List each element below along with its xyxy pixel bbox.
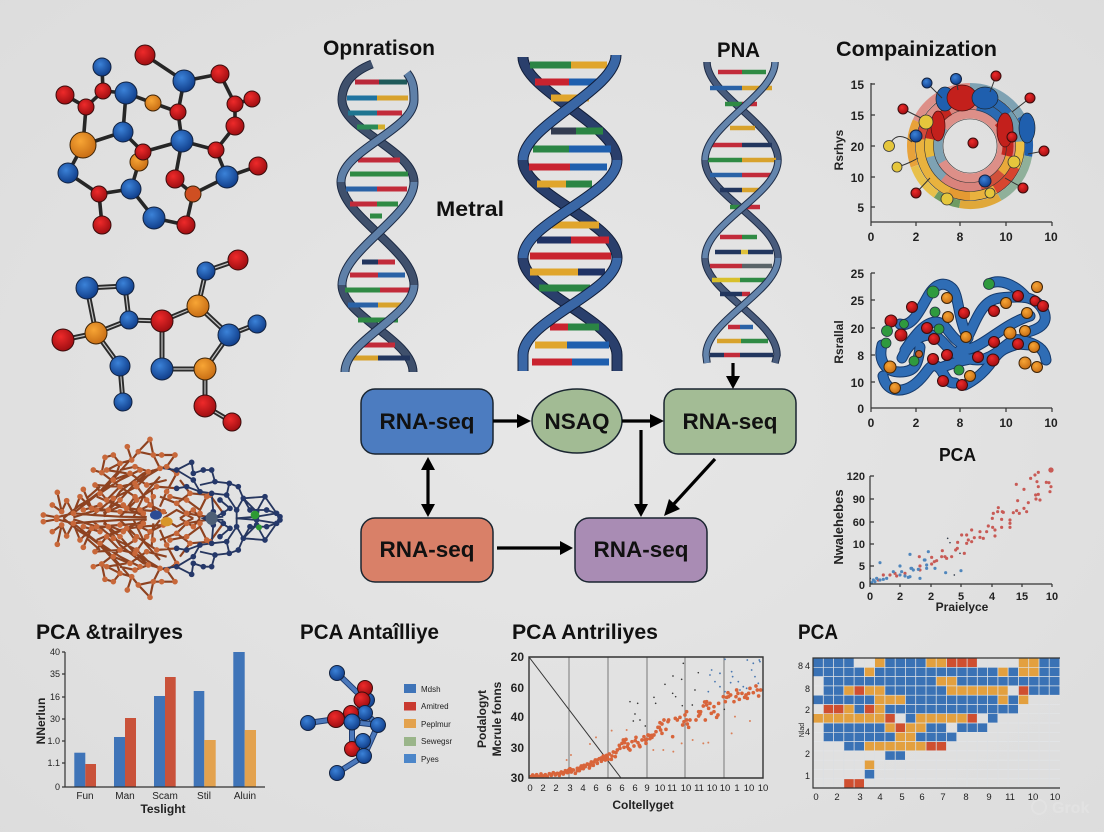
chart: heatmap: 8 [798,661,803,671]
flow box: purple RNA-seq: RNA-seq [594,537,688,562]
arrow: green box diagonal to purple box [664,459,715,516]
chart: dense scatter with gridlines: 10 [758,783,768,794]
chart: dense scatter with gridlines: 2 [540,783,546,794]
flowchart [361,363,796,582]
legend: Pyes [421,755,439,764]
chart: circular ring diagram: Rsrhys [832,129,846,170]
chart: heatmap: 4 [805,727,810,737]
chart: circular ring diagram: 15 [851,78,864,92]
heading: PCA heatmap: PCA [798,621,838,644]
chart: circular ring diagram: 2 [913,230,920,244]
chart: dense scatter with gridlines: 6 [619,783,625,794]
chart: heatmap: 11 [1005,792,1015,803]
chart: dense scatter with gridlines: 40 [511,710,524,724]
chart: dense scatter with gridlines [475,650,768,812]
flow node: NSAQ [532,389,622,453]
heading: PCA &trailryes: PCA &trailryes [36,621,183,644]
chart: grouped bars: NNerlun [34,698,48,744]
chart: dense scatter with gridlines: Podalogyt [475,690,489,748]
chart: heatmap: 7 [940,792,946,803]
chart: PCA scatter: 10 [853,539,865,551]
flow box: blue RNA-seq: RNA-seq [380,409,474,434]
chart: tangled tube diagram: 8 [857,349,864,363]
chart: circular ring diagram: 5 [857,201,864,215]
chart: dense scatter with gridlines: 11 [694,783,704,794]
chart: grouped bars: Stil [197,791,211,802]
chart: grouped bars: 1.0 [47,736,60,746]
chart: tangled tube diagram: Rsrallal [832,320,846,364]
chart: PCA scatter: 5 [859,561,865,573]
chart: heatmap: 3 [857,792,863,803]
chart: dense scatter with gridlines: Coltellyget [612,798,674,812]
heading: PCA Antaillye: PCA Antaîlliye [300,621,439,644]
chart: dense scatter with gridlines: 1 [734,783,740,794]
chart: heatmap: 2 [805,749,810,759]
chart: tangled tube diagram [832,267,1058,430]
chart: dense scatter with gridlines: 30 [511,741,524,755]
heading: PNA: PNA [717,39,760,62]
chart: heatmap: 8 [963,792,969,803]
chart: dense scatter with gridlines: 6 [632,783,638,794]
legend: Sewegsr [421,737,452,746]
chart: dense scatter with gridlines: 10 [681,783,691,794]
chart: circular ring diagram [832,64,1058,244]
chart: grouped bars: 1.1 [47,758,60,768]
chart: tangled tube diagram: 25 [851,294,864,308]
arrow: helix down to green box [726,363,740,389]
molecule: protein network [43,439,280,597]
chart: tangled tube diagram: 10 [851,376,864,390]
chart: dense scatter with gridlines: 10 [707,783,717,794]
chart: tangled tube diagram: 20 [851,322,864,336]
chart: heatmap: 10 [1050,792,1060,803]
chart: heatmap: 9 [986,792,992,803]
chart: PCA scatter: 5 [958,591,964,603]
chart: PCA scatter: Nwalehebes [831,489,846,565]
chart: heatmap: 10 [1028,792,1038,803]
flow box: green RNA-seq: RNA-seq [682,409,778,434]
watermark: Grok [1032,800,1089,817]
chart: PCA scatter: 15 [1016,591,1028,603]
chart: PCA scatter: 10 [1046,591,1058,603]
flow box: purple RNA-seq [575,518,707,582]
chart: heatmap: 1 [805,771,810,781]
chart: heatmap: 0 [813,792,819,803]
legend: Peplmur [421,720,451,729]
chart: heatmap: 5 [899,792,905,803]
chart: grouped bars: 40 [50,647,60,657]
chart: dense scatter with gridlines: 3 [567,783,573,794]
arrow: blue and red boxes double headed [421,457,435,517]
heading: Compainization: Compainization [836,38,997,61]
chart: heatmap: Nlad [799,723,806,737]
heading: PCA Antriliyes: PCA Antriliyes [512,621,658,644]
legend [404,684,452,764]
chart: grouped bars: 35 [50,669,60,679]
chart: circular ring diagram: 15 [851,109,864,123]
flow box: blue RNA-seq [361,389,493,454]
arrow: red box to purple box [497,541,573,555]
chart: grouped bars: Teslight [140,802,186,816]
chart: PCA scatter: 60 [853,517,865,529]
chart: PCA scatter: 2 [928,591,934,603]
chart: grouped bars: 16 [50,692,60,702]
chart: tangled tube diagram: 0 [868,416,875,430]
legend: Mdsh [421,685,441,694]
chart: heatmap [798,658,1060,803]
chart: dense scatter with gridlines: 20 [511,650,524,664]
chart: PCA scatter: 0 [859,580,865,592]
chart: dense scatter with gridlines: 10 [720,783,730,794]
chart: circular ring diagram: 8 [957,230,964,244]
chart: heatmap: 4 [805,661,810,671]
chart: dense scatter with gridlines: 60 [511,681,524,695]
flow box: red RNA-seq: RNA-seq [380,537,474,562]
chart: PCA scatter: 90 [853,494,865,506]
chart: dense scatter with gridlines: 11 [667,783,677,794]
chart: circular ring diagram: 20 [851,140,864,154]
arrow: blue box to NSAQ [493,414,531,428]
chart: grouped bars: Scam [152,791,178,802]
chart: PCA scatter [831,470,1058,614]
helix: centre DNA [523,55,617,371]
chart: dense scatter with gridlines: 6 [593,783,599,794]
chart: tangled tube diagram: 25 [851,267,864,281]
molecule: medium two ring [52,250,266,431]
chart: dense scatter with gridlines: 10 [744,783,754,794]
chart: heatmap: 2 [805,705,810,715]
chart: grouped bars: 0 [55,782,60,792]
chart: PCA scatter: 2 [897,591,903,603]
legend: Amitred [421,702,449,711]
heading: Opnratison: Opnratison [323,37,435,60]
chart: grouped bars: 30 [50,714,60,724]
chart: tangled tube diagram: 8 [957,416,964,430]
chart: tangled tube diagram: 2 [913,416,920,430]
chart: dense scatter with gridlines: 30 [511,771,524,785]
molecule: large ball and stick [56,45,267,234]
helix: right DNA [705,62,778,363]
chart: circular ring diagram: 10 [999,230,1013,244]
molecule: small with legend [300,666,452,780]
chart: tangled tube diagram: 0 [857,402,864,416]
chart: tangled tube diagram: 10 [1044,416,1058,430]
chart: grouped bars: Fun [76,791,94,802]
watermark: Grok: Grok [1052,800,1089,817]
chart: PCA scatter: 120 [847,471,865,483]
chart: dense scatter with gridlines: Mcrule fonns [490,681,504,756]
flow box: red RNA-seq [361,518,493,582]
chart: PCA scatter: Praielyce [936,600,989,614]
chart: dense scatter with gridlines: 6 [606,783,612,794]
arrow: NSAQ to green box [622,414,664,428]
chart: dense scatter with gridlines: 4 [580,783,586,794]
chart: heatmap: 4 [877,792,883,803]
chart: dense scatter with gridlines: 9 [644,783,650,794]
chart: grouped bars: Aluin [234,791,256,802]
chart: dense scatter with gridlines: 0 [527,783,533,794]
chart: grouped bars: Man [115,791,135,802]
chart: heatmap: 6 [919,792,925,803]
arrow: NSAQ down to purple box [634,430,648,517]
chart: circular ring diagram: 10 [851,171,864,185]
chart: tangled tube diagram: 10 [999,416,1013,430]
chart: heatmap: 2 [834,792,840,803]
chart: dense scatter with gridlines: 10 [655,783,665,794]
chart: circular ring diagram: 10 [1044,230,1058,244]
chart: PCA scatter: 0 [867,591,873,603]
chart: grouped bars [34,647,265,816]
chart: heatmap: 8 [805,684,810,694]
chart: circular ring diagram: 0 [868,230,875,244]
chart: dense scatter with gridlines: 2 [553,783,559,794]
flow node: NSAQ: NSAQ [544,409,610,434]
helix: left DNA [341,64,414,372]
heading: Metral: Metral [436,198,504,221]
chart: PCA scatter: 4 [989,591,996,603]
flow box: green RNA-seq [664,389,796,454]
heading: PCA scatter: PCA [939,445,976,465]
